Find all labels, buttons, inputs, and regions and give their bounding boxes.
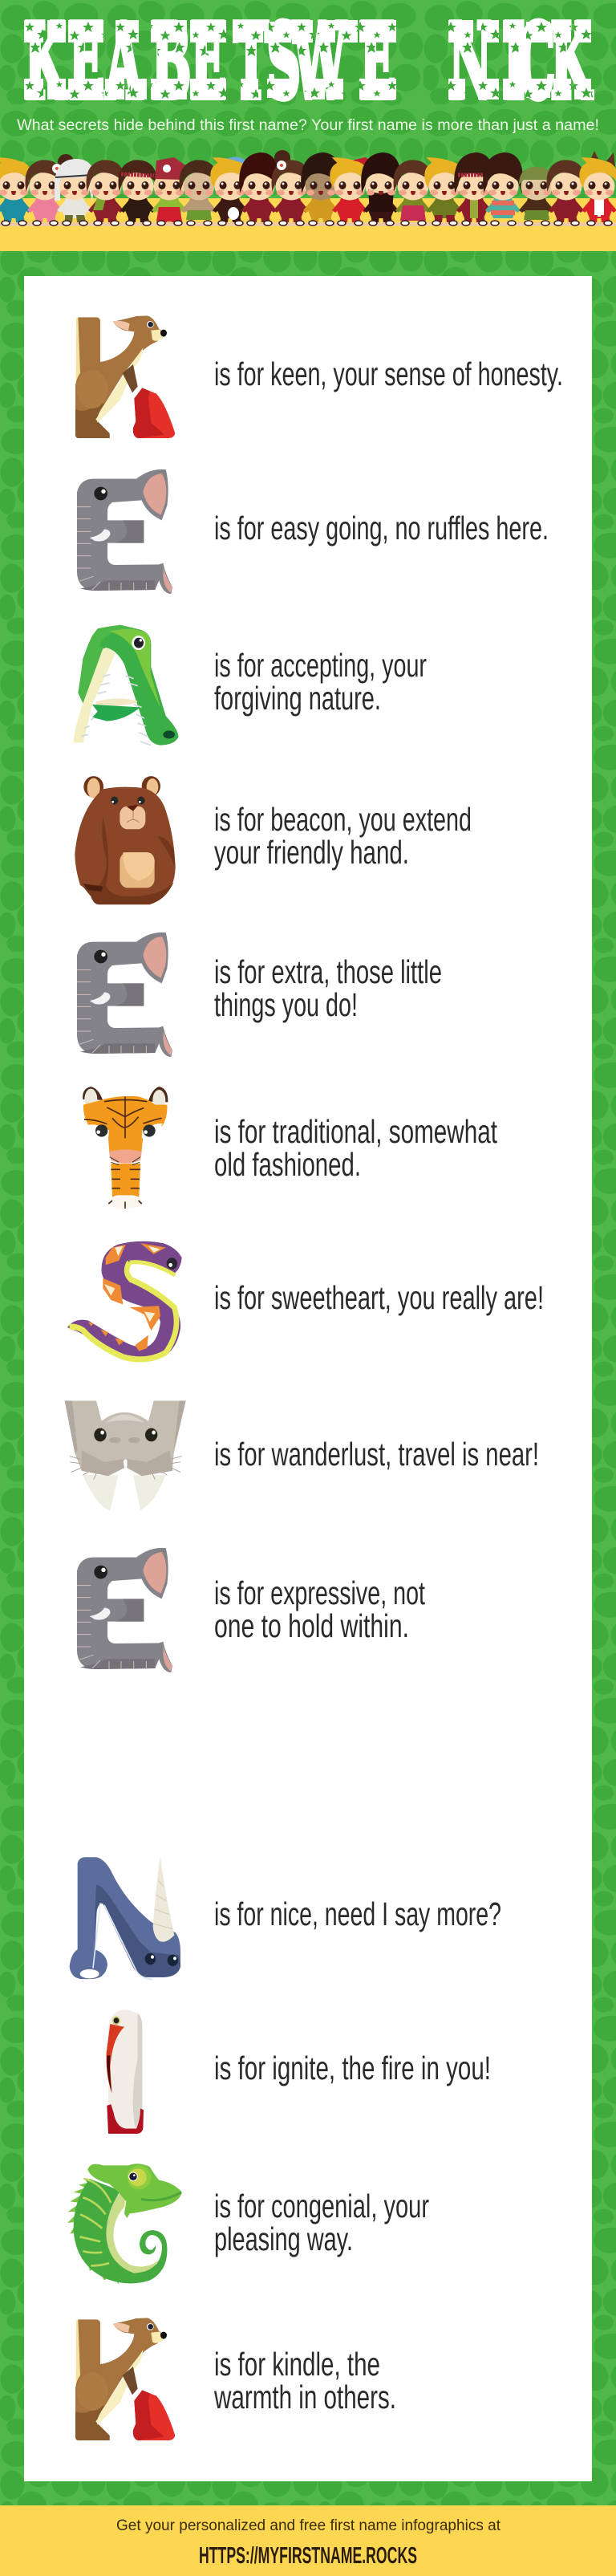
character 1 bbox=[0, 157, 33, 226]
footer text: Get your personalized and free first name infographics at bbox=[116, 2517, 501, 2534]
footer band bbox=[0, 2505, 616, 2576]
text: traditional: is for traditional, somewhat bbox=[214, 1113, 497, 1150]
white content panel bbox=[24, 276, 592, 2481]
row: I ignite bbox=[107, 2009, 491, 2134]
row: A accepting: forgiving nature. bbox=[214, 680, 381, 717]
character 11 bbox=[301, 152, 341, 226]
row: E expressive: one to hold within. bbox=[214, 1607, 409, 1644]
icon: kangaroo K bbox=[75, 315, 175, 438]
icon: stork I bbox=[107, 2009, 144, 2134]
text: extra: is for extra, those little bbox=[214, 953, 442, 990]
row: A accepting bbox=[74, 625, 427, 746]
icon: elephant E bbox=[77, 469, 172, 594]
text: ignite: is for ignite, the fire in you! bbox=[214, 2050, 491, 2086]
icon: bear B bbox=[75, 776, 176, 904]
row: N nice bbox=[70, 1855, 501, 1980]
row: B beacon bbox=[75, 776, 472, 904]
character 14 bbox=[393, 160, 433, 226]
row: T traditional: old fashioned. bbox=[214, 1146, 361, 1183]
row: E extra bbox=[77, 932, 442, 1057]
character 6 bbox=[152, 157, 190, 226]
icon: narwhal N bbox=[70, 1855, 180, 1980]
row: E easy going bbox=[77, 469, 549, 594]
row: W wanderlust bbox=[65, 1400, 539, 1511]
text: nice: is for nice, need I say more? bbox=[214, 1895, 501, 1932]
row: K kindle bbox=[75, 2318, 396, 2440]
text: congenial: is for congenial, your bbox=[214, 2188, 429, 2225]
icon: walrus W bbox=[65, 1400, 186, 1511]
character 15 bbox=[424, 157, 464, 226]
row: G congenial: pleasing way. bbox=[214, 2220, 353, 2257]
icon: snake S bbox=[67, 1241, 182, 1362]
yellow band behind characters bbox=[0, 198, 616, 251]
ground strip bbox=[0, 222, 616, 226]
subtitle: What secrets hide behind this first name? Your first name is more than just a name! bbox=[17, 117, 599, 134]
character 7 bbox=[179, 160, 219, 226]
character 16 bbox=[454, 152, 494, 226]
text: beacon: is for beacon, you extend bbox=[214, 801, 472, 838]
icon: elephant E bbox=[77, 1548, 172, 1672]
row: G congenial bbox=[67, 2164, 429, 2285]
row: K keen bbox=[75, 315, 563, 438]
row: T traditional bbox=[83, 1087, 497, 1209]
character 9 bbox=[239, 152, 279, 226]
icon: kangaroo K bbox=[75, 2318, 175, 2440]
row: E expressive bbox=[77, 1548, 425, 1672]
row: S sweetheart bbox=[67, 1241, 544, 1362]
icon: tiger T bbox=[83, 1087, 168, 1209]
text: accepting: is for accepting, your bbox=[214, 647, 427, 684]
row: E extra: things you do! bbox=[214, 986, 358, 1023]
icon: crocodile A bbox=[74, 625, 178, 746]
row: B beacon: your friendly hand. bbox=[214, 834, 409, 871]
character 20 bbox=[579, 151, 616, 226]
character 3 bbox=[55, 159, 95, 226]
character 19 bbox=[546, 160, 586, 226]
character parade bbox=[0, 150, 616, 226]
title: KEABETSWE NICK bbox=[24, 0, 594, 123]
character 8 bbox=[210, 156, 249, 226]
character 2 bbox=[25, 154, 74, 226]
character 5 bbox=[118, 160, 158, 226]
icon: elephant E bbox=[77, 932, 172, 1057]
text: kindle: is for kindle, the bbox=[214, 2346, 380, 2383]
character 10 bbox=[271, 150, 311, 226]
icon: chameleon G bbox=[67, 2164, 182, 2285]
row: K kindle: warmth in others. bbox=[213, 2379, 396, 2416]
character 17 bbox=[483, 152, 523, 226]
footer url: HTTPS://MYFIRSTNAME.ROCKS bbox=[199, 2543, 417, 2569]
text: expressive: is for expressive, not bbox=[214, 1574, 425, 1611]
character 12 bbox=[330, 157, 377, 226]
character 4 bbox=[86, 160, 126, 226]
character 18 bbox=[519, 167, 554, 226]
character 13 bbox=[361, 152, 401, 226]
